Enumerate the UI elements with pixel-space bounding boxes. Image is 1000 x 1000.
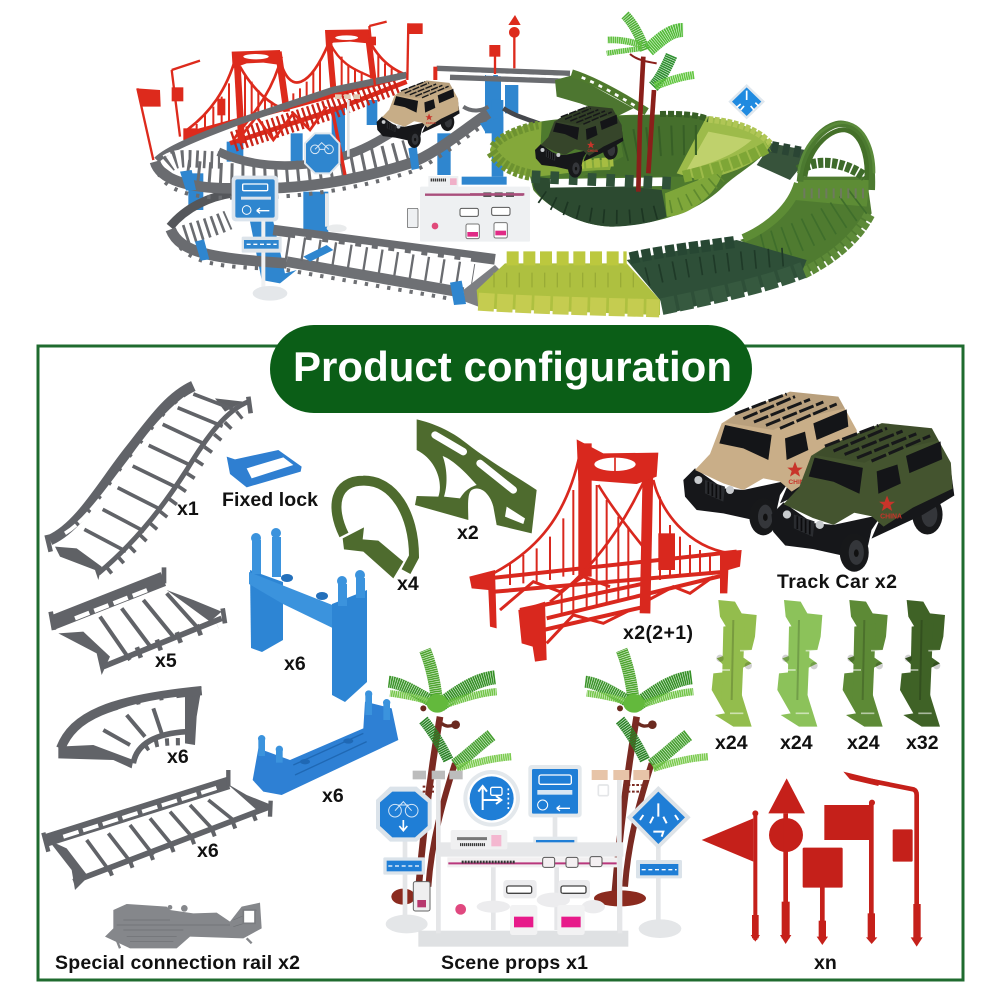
bike sign — [305, 133, 339, 173]
palm right — [585, 650, 708, 903]
part: blue base — [253, 690, 398, 795]
middle track — [155, 68, 570, 198]
bus parking sign — [528, 765, 582, 847]
label x24 mid: x24 — [847, 732, 880, 754]
red post flags — [137, 22, 514, 175]
lower flexible track: yellow segment — [477, 263, 660, 315]
lower track — [170, 193, 495, 301]
label fixed lock: Fixed lock — [222, 489, 318, 511]
part: green arch piece — [336, 481, 414, 578]
track cars — [683, 392, 954, 572]
track between bowl and arch — [757, 143, 813, 180]
palm left — [388, 650, 512, 903]
part: fixed lock — [227, 450, 302, 487]
label x6 base: x6 — [322, 785, 344, 807]
label x24 lime: x24 — [715, 732, 748, 754]
lamp posts — [413, 770, 649, 933]
square sign — [803, 848, 843, 945]
label special connection rail: Special connection rail x2 — [55, 952, 300, 974]
palm tree trunks — [630, 54, 657, 192]
part: special connection rail — [105, 903, 262, 948]
rectangular flag — [824, 800, 877, 944]
palm fronds — [607, 15, 694, 87]
panel: product configuration frame — [38, 346, 963, 980]
green car in bowl — [535, 106, 623, 178]
tan car on track — [377, 80, 460, 148]
label x6 straight: x6 — [197, 840, 219, 862]
green car — [771, 423, 954, 572]
station board — [407, 176, 530, 242]
part: green ramp support — [415, 419, 537, 533]
piece mid green — [843, 600, 888, 727]
round sign — [463, 770, 520, 827]
flexible track pieces — [712, 600, 945, 727]
tan car — [683, 392, 860, 535]
tilted bowl — [490, 115, 772, 227]
label x2: x2 — [457, 522, 479, 544]
label x24 green: x24 — [780, 732, 813, 754]
bike sign — [376, 787, 432, 933]
lower flexible track: dark segment — [627, 240, 807, 313]
label x5: x5 — [155, 650, 177, 672]
label track car: Track Car x2 — [777, 571, 897, 593]
red signs set — [702, 772, 923, 947]
scene left half: gray track and red bridge — [137, 15, 570, 307]
part: blue support frame — [249, 528, 367, 702]
part: long ramp rail — [47, 386, 251, 580]
station board edge — [470, 191, 524, 198]
crossing sign — [728, 84, 765, 119]
scene right half: flexible green track — [470, 15, 874, 315]
part: red bridge — [469, 439, 742, 662]
heading pill — [270, 325, 752, 413]
part: straight rail — [43, 770, 272, 890]
triangular flag — [702, 810, 760, 942]
scene props set — [376, 650, 708, 947]
part: curved rail — [58, 687, 202, 768]
photo: assembled track set — [137, 15, 874, 315]
heading: Product configuration — [293, 343, 732, 390]
palm bases — [391, 889, 646, 906]
piece dark green — [900, 600, 945, 727]
ramp support — [555, 75, 633, 117]
label bridge: x2(2+1) — [623, 622, 693, 644]
lamp post — [843, 772, 923, 947]
label x6 support: x6 — [284, 653, 306, 675]
lower flexible track: arch end — [740, 177, 872, 277]
blue support pillars — [188, 75, 518, 283]
white pole behind — [322, 193, 332, 227]
piece light green — [777, 600, 822, 727]
piece light lime — [712, 600, 757, 727]
label x4: x4 — [397, 573, 419, 595]
label scene props: Scene props x1 — [441, 952, 588, 974]
label x1: x1 — [177, 498, 199, 520]
red bridge — [185, 30, 407, 143]
small lamp cluster — [335, 94, 360, 99]
part: medium rail — [51, 567, 225, 675]
label x6 curve: x6 — [167, 746, 189, 768]
diamond crossing sign — [627, 786, 691, 938]
parking sign — [232, 176, 287, 301]
label xn: xn — [814, 952, 837, 974]
triangle and circle sign — [768, 778, 805, 944]
station platform — [413, 830, 628, 947]
label x32: x32 — [906, 732, 939, 754]
